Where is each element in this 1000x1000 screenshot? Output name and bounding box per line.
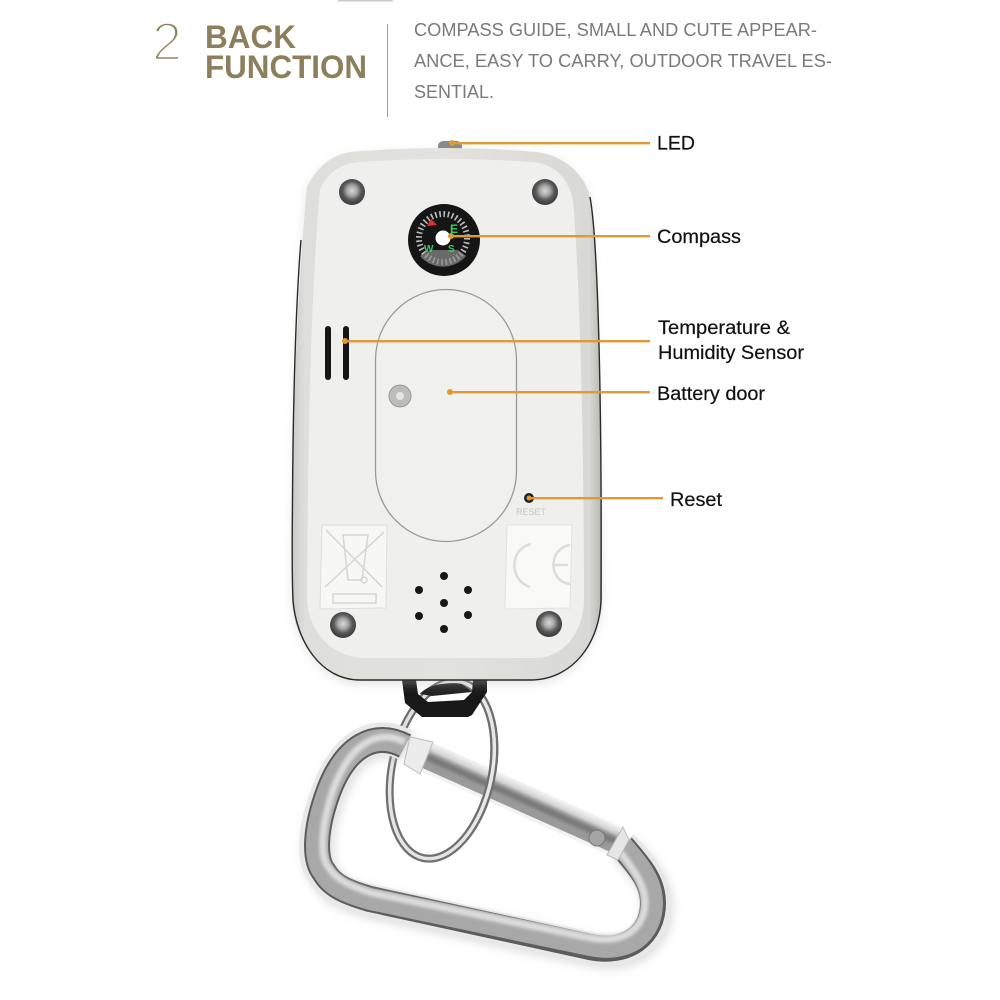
callout: Reset — [526, 490, 723, 511]
carabiner body — [315, 737, 655, 950]
callout: Battery door — [447, 384, 766, 405]
key ring front — [468, 680, 498, 840]
rim — [292, 148, 602, 680]
carabiner and key ring — [315, 672, 658, 954]
callout: Temperature and Humidity Sensor — [342, 318, 805, 364]
key ring back — [374, 672, 510, 868]
callout: Compass: Compass — [657, 227, 741, 248]
dark body edge — [292, 197, 601, 680]
heading: back function — [205, 19, 367, 85]
callout: Battery door: Battery door — [657, 384, 766, 405]
battery door — [376, 290, 516, 542]
device body — [292, 141, 602, 684]
speaker holes — [415, 572, 472, 633]
recycling label — [320, 525, 387, 609]
carabiner shadow — [318, 743, 658, 954]
door screw — [389, 385, 411, 407]
callout: Temperature and Humidity Sensor: Temperature & — [658, 318, 790, 339]
compass: W — [424, 244, 434, 255]
description text — [414, 20, 832, 102]
description text: ANCE, EASY TO CARRY, OUTDOOR TRAVEL ES- — [414, 51, 832, 71]
callout: LED: LED — [657, 134, 695, 154]
callout: LED — [449, 134, 695, 154]
reset hole — [524, 493, 534, 503]
compass — [408, 204, 480, 276]
body shadow — [292, 152, 602, 684]
title number: 2 — [152, 12, 182, 72]
heading: back function: FUNCTION — [205, 49, 367, 85]
compass: S — [448, 244, 455, 255]
compass: E — [450, 222, 458, 236]
description text: COMPASS GUIDE, SMALL AND CUTE APPEAR- — [414, 20, 817, 40]
callout: Temperature and Humidity Sensor: Humidity Sensor — [658, 343, 805, 364]
heading: back function: BACK — [205, 19, 296, 55]
screws — [330, 179, 562, 638]
sensor slots — [325, 326, 349, 380]
LED nub — [438, 141, 462, 153]
CE label — [505, 525, 572, 609]
callout: Reset: Reset — [670, 490, 723, 511]
black strap loop — [402, 680, 487, 717]
description text: SENTIAL. — [414, 82, 494, 102]
reset label: RESET — [516, 507, 547, 517]
callout: Compass — [448, 227, 741, 248]
face — [307, 159, 584, 658]
carabiner gate — [404, 737, 629, 860]
